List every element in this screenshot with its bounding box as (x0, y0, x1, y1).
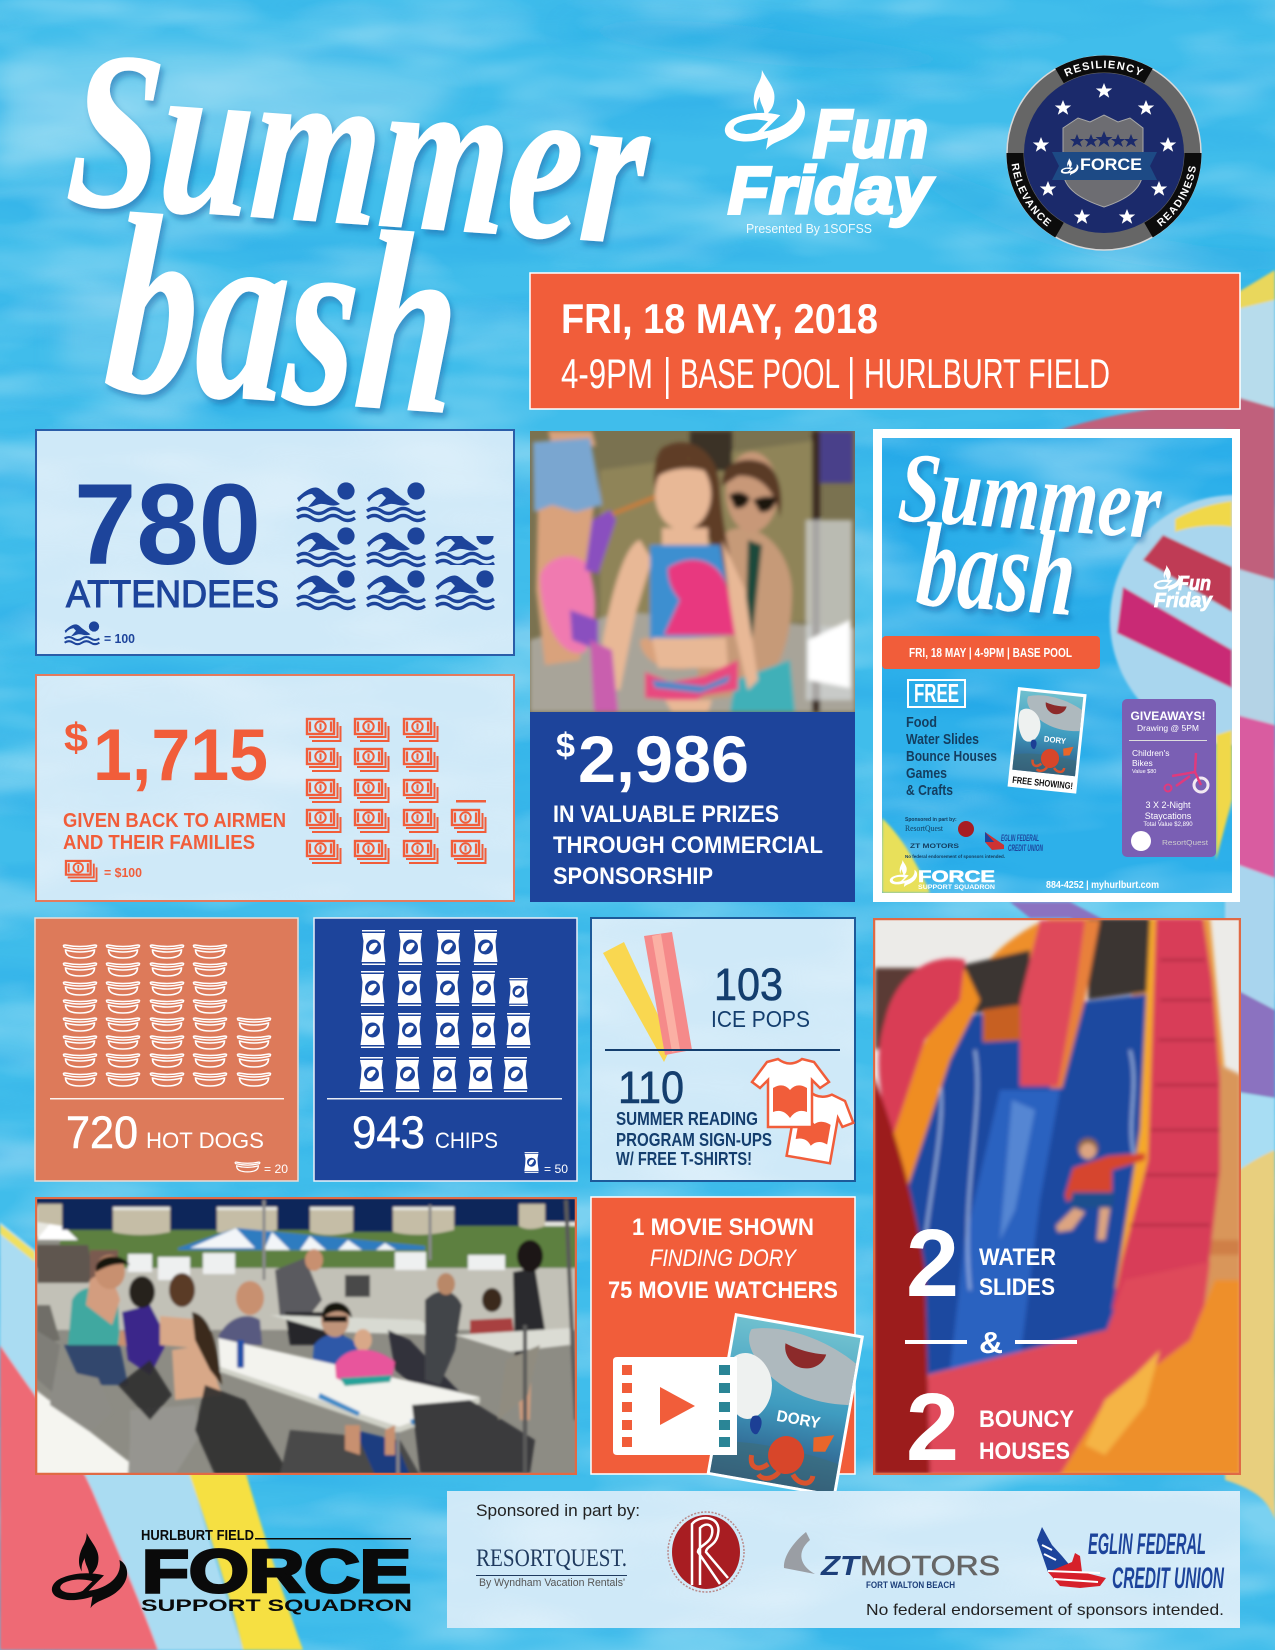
icon: film with play button (613, 1357, 737, 1455)
logo: ZT Motors: FORT WALTON BEACH (866, 1580, 955, 1591)
poster sponsors: ResortQuest (905, 824, 944, 833)
text: movie stats: FINDING DORY (650, 1245, 798, 1272)
text: sponsored in part by: Sponsored in part by: (476, 1502, 640, 1520)
stat: 943 chips: CHIPS (435, 1128, 498, 1153)
poster sponsors: CREDIT UNION (1008, 843, 1043, 853)
text: prizes: THROUGH COMMERCIAL (553, 832, 823, 859)
poster mini movie (1008, 687, 1087, 794)
poster title (898, 456, 1167, 622)
panel: attendees (36, 430, 514, 655)
background: beach ball right side (1010, 270, 1275, 1520)
stat: 110 sign-ups (616, 1062, 772, 1169)
stat: 103 ice pops (711, 959, 810, 1032)
number: $2,986: 2,986 (578, 722, 749, 796)
poster sponsors: EGLIN FEDERAL (1001, 833, 1039, 843)
legend: swimmer equals 100: = 100 (104, 631, 135, 646)
stat: 110 sign-ups: W/ FREE T-SHIRTS! (616, 1149, 752, 1169)
icon grid: chips (360, 930, 530, 1092)
poster thumbnail: Summer Bash flyer (873, 429, 1275, 902)
beach ball (882, 493, 1232, 893)
poster giveaways: Staycations (1145, 811, 1192, 821)
icon grid: money (307, 719, 486, 863)
legend: swimmer equals 100 (65, 621, 135, 646)
title: Summer Bash (62, 2, 657, 468)
poster logo: Fun Friday: Fun (1178, 573, 1211, 595)
text: 2 bouncy houses: BOUNCY (979, 1406, 1074, 1433)
poster bar (882, 636, 1100, 669)
text: disclaimer: No federal endorsement of sponsors intended. (866, 1602, 1224, 1619)
photo: families under tent (35, 1197, 577, 1475)
text: 2 water slides: WATER (979, 1244, 1056, 1271)
poster giveaways: Drawing @ 5PM (1137, 723, 1199, 733)
panel: hot dogs (35, 918, 298, 1181)
logo: ResortQuest (476, 1545, 627, 1589)
text: prizes: IN VALUABLE PRIZES (553, 801, 779, 828)
poster list: Games (906, 765, 947, 782)
badge: Force Support Squadron: READINESS (1156, 166, 1196, 226)
text: given back: AND THEIR FAMILIES (63, 832, 255, 854)
logo: Fun Friday: Friday (728, 153, 934, 227)
badge: Force Support Squadron (1006, 55, 1202, 251)
poster footer: SUPPORT SQUADRON (918, 884, 995, 891)
poster logo: Fun Friday: Friday (1154, 590, 1213, 612)
logo: ZT Motors: MOTORS (860, 1550, 1000, 1581)
logo: ResortQuest: By Wyndham Vacation Rentals' (479, 1577, 625, 1589)
banner: date and place: 4-9PM (561, 350, 653, 397)
panel: sponsors (447, 1491, 1240, 1628)
poster list: Water Slides (906, 731, 979, 748)
badge: Force Support Squadron: RELEVANCE (1012, 163, 1052, 226)
stat: 720 hot dogs: HOT DOGS (146, 1128, 264, 1153)
logo: Hurlburt Field Force Support Squadron: SUPPORT SQUADRON (141, 1596, 412, 1615)
legend: hot dog equals 20: = 20 (264, 1162, 288, 1176)
stat: 103 ice pops: ICE POPS (711, 1006, 810, 1032)
poster sponsors: ZT MOTORS (910, 843, 960, 850)
stat: 720 hot dogs: 720 (66, 1107, 138, 1158)
panel: valuable prizes (530, 712, 855, 902)
panel: movie (591, 1197, 864, 1497)
text: 2 water slides: 2 (906, 1210, 959, 1317)
title: Summer Bash: bash (99, 163, 468, 468)
text: 2 bouncy houses: 2 (906, 1374, 959, 1481)
poster giveaways: GIVEAWAYS! (1131, 709, 1205, 723)
text: given back (63, 810, 286, 854)
text: 2 bouncy houses: HOUSES (979, 1438, 1070, 1465)
logo: ZT Motors: ZT (820, 1550, 862, 1581)
stat: 110 sign-ups: 110 (618, 1062, 684, 1113)
poster giveaways: Children's (1132, 748, 1170, 758)
poster sponsors: Sponsored in part by: (905, 817, 957, 823)
text: 2 water slides: SLIDES (979, 1274, 1055, 1301)
text: given back: GIVEN BACK TO AIRMEN (63, 810, 286, 832)
logo: Eglin Federal Credit Union (1037, 1527, 1225, 1595)
poster list (906, 714, 997, 799)
banner: date and place (530, 273, 1240, 409)
panel: ice pops and reading program (591, 918, 858, 1181)
logo: Hurlburt Field Force Support Squadron (52, 1527, 412, 1615)
legend: chips equals 50: = 50 (544, 1162, 568, 1176)
poster sponsors: No federal endorsement of sponsors intended. (905, 854, 1005, 860)
banner: date and place: FRI, 18 MAY, 2018 (561, 295, 878, 342)
legend: money equals $100 (66, 861, 142, 881)
legend: chips equals 50 (524, 1152, 568, 1176)
text: 2 bouncy houses (909, 1393, 1074, 1460)
poster sponsors (905, 817, 1043, 860)
poster giveaways (1122, 699, 1216, 857)
poster footer (890, 860, 1159, 891)
logo: Fun Friday: Fun (813, 96, 928, 172)
title: Summer Bash: Summer (62, 2, 657, 292)
divider: and: & (979, 1325, 1003, 1360)
background: beach ball lower left (0, 1222, 303, 1650)
number: $1,715: $ (64, 716, 88, 760)
poster giveaways: Bikes (1132, 758, 1153, 768)
icon grid: hot dogs (63, 945, 271, 1086)
poster list: & Crafts (906, 782, 953, 799)
logo: R emblem (668, 1512, 744, 1592)
number: $2,986: $ (556, 727, 575, 765)
logo: Hurlburt Field Force Support Squadron: HURLBURT FIELD (141, 1527, 254, 1544)
poster logo: Fun Friday (1154, 565, 1213, 612)
poster footer: 884-4252 | myhurlburt.com (1046, 880, 1159, 891)
photo: girl and mother (530, 431, 855, 712)
text: prizes: SPONSORSHIP (553, 863, 713, 890)
text: prizes (553, 801, 823, 890)
label: attendees: ATTENDEES (66, 574, 279, 616)
text: movie stats: 1 MOVIE SHOWN (632, 1214, 814, 1241)
icon grid: swimmers (297, 482, 494, 608)
text: 2 water slides (909, 1229, 1056, 1296)
number: 780: 780 (74, 461, 261, 589)
poster giveaways: Value $80 (1132, 769, 1156, 775)
poster giveaways: Total Value $2,890 (1143, 822, 1193, 828)
panel: chips (314, 918, 577, 1181)
poster title: bash (913, 497, 1080, 641)
logo: Hurlburt Field Force Support Squadron: FORCE (142, 1538, 411, 1605)
number: $1,715: 1,715 (93, 715, 268, 796)
photo: water slide (873, 918, 1241, 1481)
stat: 110 sign-ups: SUMMER READING (616, 1109, 758, 1129)
poster list: Food (906, 714, 937, 731)
logo: Fun Friday: Presented By 1SOFSS (746, 221, 872, 236)
legend: hot dog equals 20 (235, 1162, 288, 1176)
poster giveaways: ResortQuest (1162, 840, 1208, 847)
poster giveaways: 3 X 2-Night (1145, 800, 1191, 810)
stat: 943 chips: 943 (352, 1107, 425, 1158)
icon: t-shirts with books (752, 1059, 858, 1166)
stat: 110 sign-ups: PROGRAM SIGN-UPS (616, 1130, 772, 1150)
badge: Force Support Squadron: RESILIENCY (1064, 60, 1144, 76)
logo: ZT Motors (784, 1532, 1000, 1591)
poster footer: FORCE (918, 867, 995, 886)
poster mini movie: FREE SHOWING! (1012, 775, 1073, 792)
badge: Force Support Squadron: FORCE (1080, 155, 1142, 174)
logo: Fun Friday (725, 70, 934, 236)
stat: 720 hot dogs (66, 1107, 264, 1158)
icon: ice pops (603, 932, 692, 1062)
text: movie stats: 75 MOVIE WATCHERS (608, 1277, 838, 1304)
logo: ResortQuest: RESORTQUEST. (476, 1545, 627, 1572)
poster free box (908, 678, 965, 708)
stat: 103 ice pops: 103 (714, 959, 783, 1010)
legend: money equals $100: = $100 (104, 865, 142, 880)
poster list: Bounce Houses (906, 748, 997, 765)
text: movie stats (608, 1214, 838, 1304)
divider: and (905, 1332, 1077, 1354)
poster bar: FRI, 18 MAY | 4-9PM | BASE POOL (909, 646, 1072, 660)
image: Finding Dory poster (707, 1313, 864, 1497)
banner: date and place: BASE POOL (680, 350, 840, 397)
banner: date and place: HURLBURT FIELD (864, 350, 1110, 397)
poster free box: FREE (914, 678, 959, 708)
stat: 943 chips (352, 1107, 498, 1158)
poster title: Summer (895, 431, 1165, 560)
panel: money given back (36, 675, 514, 901)
